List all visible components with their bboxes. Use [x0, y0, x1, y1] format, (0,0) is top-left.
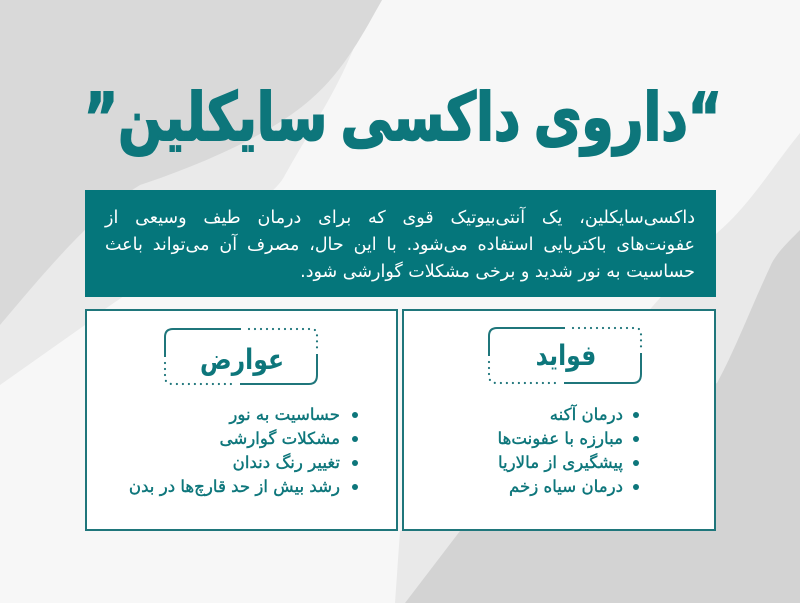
- panel: benefits: [402, 309, 716, 531]
- intro text: [104, 206, 695, 282]
- title: “داروی داکسی سایکلین”: [84, 79, 722, 156]
- bullet list: benefits: پیشگیری از مالاریا: [498, 453, 623, 472]
- heading frame: [164, 328, 318, 386]
- heading: side effects: عوارض: [200, 343, 284, 376]
- bullet list: side effects: مشکلات گوارشی: [220, 429, 340, 448]
- intro text: داکسی‌سایکلین، یک آنتی‌بیوتیک قوی که برای درمان طیف وسیعی از: [105, 208, 695, 228]
- bullet list: benefits: درمان سیاه زخم: [509, 477, 623, 496]
- panel: side effects: [85, 309, 398, 531]
- bullet list: side effects: حساسیت به نور: [229, 405, 340, 424]
- bullet list: benefits: مبارزه با عفونت‌ها: [498, 429, 623, 448]
- heading: benefits: فواید: [536, 339, 596, 372]
- bullet list: benefits: درمان آکنه: [550, 405, 623, 424]
- intro text: حساسیت به نور شدید و برخی مشکلات گوارشی شود.: [300, 262, 695, 282]
- bullet list: side effects: [129, 405, 358, 496]
- bullet list: side effects: تغییر رنگ دندان: [233, 453, 340, 472]
- intro text: عفونت‌های باکتریایی استفاده می‌شود. با این حال، مصرف آن می‌تواند باعث: [105, 235, 695, 255]
- intro box: [85, 190, 716, 297]
- bullet list: benefits: [498, 404, 639, 496]
- bullet list: side effects: رشد بیش از حد قارچ‌ها در بدن: [129, 477, 340, 496]
- heading frame: [488, 326, 642, 384]
